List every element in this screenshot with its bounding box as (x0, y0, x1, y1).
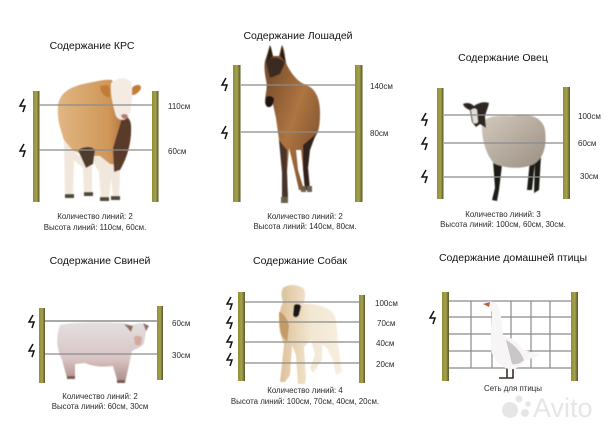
panel: sheep (422, 52, 601, 229)
heading: dogs: Содержание Собак (253, 255, 347, 267)
fence posts: sheep (437, 87, 570, 199)
height labels: dogs (375, 299, 398, 369)
height labels: horses (370, 82, 393, 138)
height labels: horses: 140см (370, 82, 393, 91)
height labels: cattle (168, 102, 190, 156)
fence wires: horses (241, 85, 355, 132)
panel: pigs (29, 255, 190, 411)
illustration: pig (57, 322, 149, 383)
height labels: sheep (578, 112, 601, 181)
height labels: dogs: 20см (376, 360, 394, 369)
caption: sheep: Высота линий: 100см, 60см, 30см. (440, 220, 566, 229)
panel: horses (222, 30, 393, 231)
icons: lightning bolts (227, 297, 232, 366)
caption: poultry: Сеть для птицы (484, 384, 542, 393)
heading: poultry: Содержание домашней птицы (439, 252, 587, 264)
icons: lightning bolts (20, 99, 25, 157)
heading: pigs: Содержание Свиней (50, 255, 151, 267)
height labels: sheep: 60см (578, 139, 596, 148)
fence wires: cattle (39, 105, 152, 150)
panel: dogs (227, 255, 398, 406)
fence posts: pigs (39, 306, 163, 383)
height labels: pigs: 30см (172, 351, 190, 360)
caption: pigs: Количество линий: 2 (62, 392, 138, 401)
heading: cattle: Содержание КРС (50, 40, 135, 52)
icons: lightning bolts (422, 113, 427, 183)
illustration: goose (483, 301, 540, 378)
caption: horses: Количество линий: 2 (267, 212, 343, 221)
icon: lightning bolt (430, 311, 435, 324)
fence posts: dogs (238, 292, 365, 383)
height labels: pigs: 60см (172, 319, 190, 328)
illustration: sheep (463, 102, 546, 201)
fence posts: poultry (442, 292, 578, 381)
height labels: horses: 80см (370, 129, 388, 138)
height labels: dogs: 40см (376, 339, 394, 348)
caption: horses (253, 212, 357, 231)
caption: horses: Высота линий: 140см, 80см. (253, 222, 357, 231)
panel: cattle (20, 40, 190, 232)
fence wires: dogs (245, 302, 359, 363)
illustration: horse (264, 45, 320, 203)
caption: cattle: Высота линий: 110см, 60см. (44, 223, 146, 232)
height labels: cattle: 60см (168, 147, 186, 156)
icons: lightning bolts (29, 315, 34, 357)
caption: sheep: Количество линий: 3 (465, 210, 541, 219)
caption: sheep (440, 210, 566, 229)
height labels: cattle: 110см (168, 102, 190, 111)
caption: cattle: Количество линий: 2 (57, 212, 133, 221)
fence wires: pigs (45, 321, 157, 354)
watermark: Avito (502, 393, 593, 423)
caption: dogs: Количество линий: 4 (267, 386, 343, 395)
caption: dogs: Высота линий: 100см, 70см, 40см, 20см. (231, 397, 379, 406)
illustration: dog (279, 285, 342, 384)
illustration: cow (58, 78, 141, 201)
watermark: Avito: Avito (533, 393, 593, 423)
heading: horses: Содержание Лошадей (243, 30, 353, 42)
caption: pigs: Высота линий: 60см, 30см (52, 402, 148, 411)
height labels: sheep: 30см (580, 172, 598, 181)
fence posts: horses (233, 65, 362, 202)
height labels: pigs (172, 319, 190, 360)
height labels: dogs: 70см (377, 319, 395, 328)
height labels: sheep: 100см (578, 112, 601, 121)
fence posts: cattle (33, 91, 158, 202)
caption: dogs (231, 386, 379, 406)
height labels: dogs: 100см (375, 299, 398, 308)
icons: lightning bolts (222, 78, 227, 139)
fence wires: sheep (444, 115, 563, 177)
net: poultry (449, 301, 571, 368)
caption: cattle (44, 212, 146, 232)
panel: poultry (430, 252, 587, 393)
caption: pigs (52, 392, 148, 411)
heading: sheep: Содержание Овец (458, 52, 548, 64)
